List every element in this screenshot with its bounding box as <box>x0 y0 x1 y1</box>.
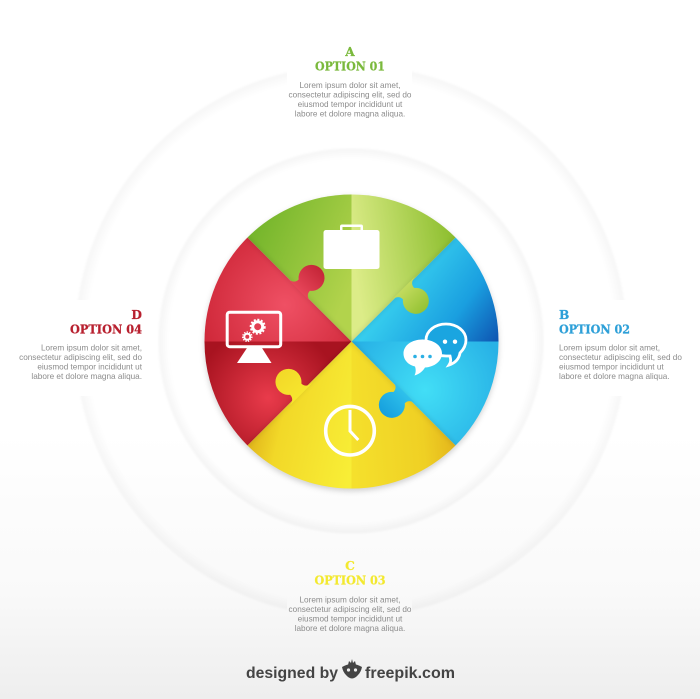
text: option A description: consectetur adipiscing elit, sed do <box>289 90 412 100</box>
heading: D: D <box>131 308 142 322</box>
inner ring <box>158 148 544 534</box>
text: option D description: eiusmod tempor incididunt ut <box>37 362 143 372</box>
heading: option 03: OPTION 03 <box>314 574 386 588</box>
text: option A description: eiusmod tempor incididunt ut <box>298 100 403 109</box>
text: option D description: labore et dolore magna aliqua. <box>31 372 142 381</box>
footer credit: freepik.com <box>365 665 455 682</box>
icon: briefcase <box>324 224 380 269</box>
icon: clock <box>326 406 374 455</box>
piece: yellow <box>248 342 456 489</box>
text: option A description: labore et dolore magna aliqua. <box>295 110 405 118</box>
heading: C: C <box>345 559 355 573</box>
piece: red <box>204 238 352 446</box>
heading: option 04: OPTION 04 <box>70 322 142 336</box>
text: option C description: Lorem ipsum dolor sit amet, <box>299 596 401 604</box>
puzzle wheel <box>204 194 499 491</box>
text: option B description: eiusmod tempor incididunt ut <box>559 362 664 372</box>
knob: yellow into red <box>267 361 313 406</box>
heading: B: B <box>559 308 569 322</box>
text: option B description: Lorem ipsum dolor sit amet, <box>559 344 660 352</box>
footer credit <box>246 659 455 682</box>
footer credit: designed by <box>246 665 338 682</box>
text: option C description: consectetur adipiscing elit, sed do <box>289 605 412 614</box>
icon: monitor with gears <box>227 312 281 363</box>
option B block <box>559 308 682 381</box>
heading: option 01: OPTION 01 <box>315 60 385 74</box>
option A block <box>289 45 412 118</box>
text: option C description: eiusmod tempor incididunt ut <box>298 614 403 624</box>
heading: A: A <box>344 45 355 59</box>
heading: option 02: OPTION 02 <box>559 322 630 336</box>
icon: chat bubbles <box>404 324 466 376</box>
icon: freepik logo <box>342 659 362 678</box>
text: option D description: Lorem ipsum dolor sit amet, <box>41 344 142 352</box>
text: option D description: consectetur adipiscing elit, sed do <box>19 353 142 362</box>
piece: green <box>248 194 456 342</box>
outer ring <box>75 65 627 617</box>
option C block <box>289 559 412 633</box>
text: option A description: Lorem ipsum dolor sit amet, <box>299 81 401 90</box>
option D block <box>19 308 143 381</box>
knob: red into green <box>287 257 333 302</box>
knob: blue into yellow <box>371 380 416 426</box>
knob: green into blue <box>391 276 437 322</box>
piece: blue <box>352 238 499 446</box>
text: option B description: consectetur adipiscing elit, sed do <box>559 353 682 362</box>
piece edge shadows <box>248 238 456 446</box>
text: option B description: labore et dolore magna aliqua. <box>559 372 670 381</box>
text: option C description: labore et dolore magna aliqua. <box>295 624 405 633</box>
